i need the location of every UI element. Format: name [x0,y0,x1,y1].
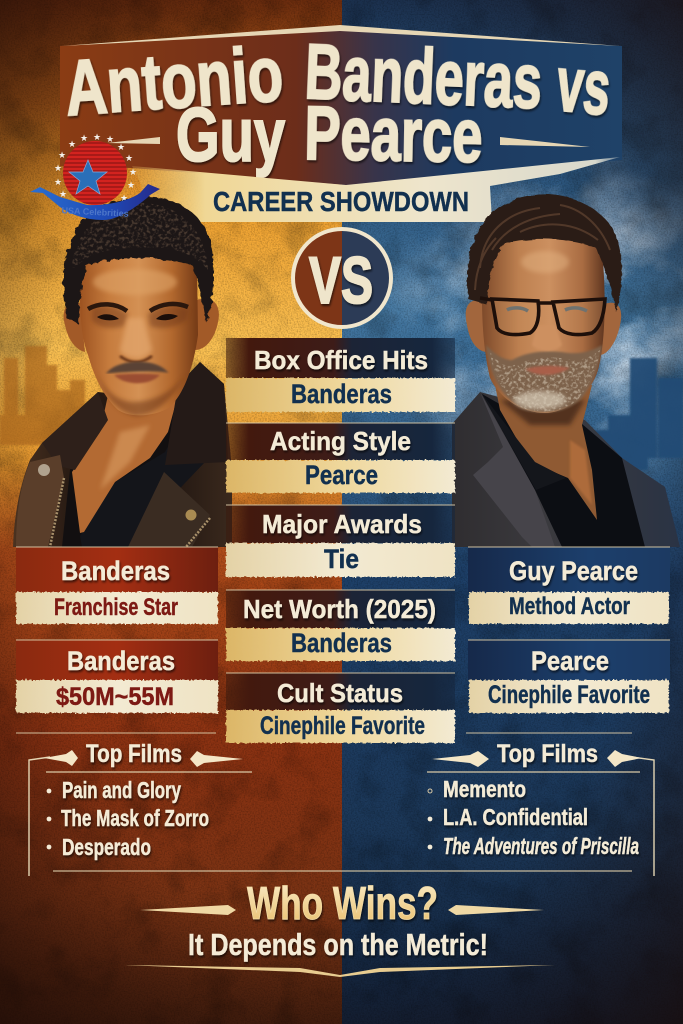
panel: Pearce style: Guy Pearce [509,556,638,586]
star ring: ★ [58,151,66,161]
film list: Memento [443,776,526,802]
shirt [482,394,645,547]
thin dividers [16,423,670,733]
nostril shadow [120,356,152,362]
vs badge [293,229,391,327]
star ring: ★ [59,190,67,200]
neck and chest [72,395,178,533]
ornament: bottom flourish [125,965,555,977]
ornament left [44,750,78,766]
comparison: cult status: Cinephile Favorite [260,712,425,740]
eyes [97,314,178,320]
jacket stud right [186,510,196,520]
subtitle ribbon [132,157,620,222]
panel: Banderas franchise [16,547,218,624]
chin and cheek shadow [95,370,185,416]
hair strands [475,205,610,290]
subtitle text: CAREER SHOWDOWN [213,186,469,217]
hair [467,194,622,312]
beard base [486,345,602,412]
divider above verdict [53,870,632,872]
comparison: box office hits: Box Office Hits [254,345,428,375]
left lapel [473,392,555,547]
comparison: box office hits [226,338,455,412]
comparison: major awards: Tie [324,544,359,574]
hair [63,197,214,324]
star ring: ★ [80,134,88,144]
comparison: net worth: Net Worth (2025) [243,594,436,624]
portrait: Antonio Banderas [13,197,232,547]
bullets [47,789,51,849]
title word: Banderas: Banderas [303,27,544,125]
verdict [188,877,488,962]
nose [120,318,152,358]
frame [632,757,654,876]
star ring: ★ [117,143,125,153]
panel: Banderas net worth: Banderas [67,646,175,676]
title word: Antonio: Antonio [62,29,286,132]
film list: L.A. Confidential [443,804,588,830]
title flourish right [500,137,590,147]
forehead light [93,269,177,295]
banner top rule [62,25,620,46]
comparison: cult status: Cult Status [277,678,403,708]
ears [64,299,219,352]
shirt [62,400,190,547]
bar [226,378,455,412]
bullets [428,789,432,849]
title banner [60,25,622,185]
star ring: ★ [127,181,135,191]
city skyline right [590,358,683,470]
face [482,236,605,413]
hair curls [72,203,208,270]
film list: Pain and Glory [62,777,181,803]
title word: Pearce: Pearce [304,91,483,179]
blue star [69,160,107,194]
comparison: acting style: Pearce [305,460,378,490]
under chin shadow [500,400,585,425]
top films: Pearce [427,740,654,876]
panel: Banderas net worth: $50M~55M [56,683,174,711]
chest highlight [100,425,150,490]
ornament left [432,751,489,767]
star ring: ★ [68,140,76,150]
eye sockets [92,306,188,328]
jacket zip [50,478,210,547]
star ring: ★ [54,164,62,174]
jacket right collar [165,362,228,465]
logo badge [30,133,160,220]
film list: The Mask of Zorro [61,805,209,831]
panel: Pearce style [468,547,670,624]
comparison: cult status [226,673,455,743]
collar left [42,392,108,470]
shirt right [80,405,205,547]
star ring: ★ [120,194,128,204]
title flourish left [107,137,160,144]
star ring: ★ [129,168,137,178]
star ring: ★ [125,154,133,164]
glasses [480,298,605,335]
eyes [507,308,587,311]
ornament right [607,750,642,767]
film list [443,776,639,859]
forehead highlight [521,251,569,273]
comparison: acting style [226,423,455,493]
ribbon label: USA Celebrities [61,205,129,219]
star ring: ★ [54,178,62,188]
film list [61,777,209,860]
comparison: net worth [226,590,455,661]
star ring [54,133,137,204]
lips [525,366,570,375]
subheading: It Depends on the Metric! [188,927,488,962]
top films: Banderas [29,740,252,876]
panel: Pearce cult status [468,640,670,713]
jacket [452,392,680,547]
ornament: who wins flanks [140,905,544,915]
red striped disc [63,141,127,205]
ears [466,300,621,355]
frame [29,757,50,876]
heading: Top Films [497,740,598,768]
panel: Pearce style: Method Actor [509,593,630,620]
jacket stud left [38,464,50,476]
nose [532,325,562,350]
ornament right [190,751,243,767]
panel: Banderas net worth [16,640,218,713]
face [80,254,198,415]
jacket [13,362,232,547]
beard grey grain [490,350,600,411]
city skyline left [0,346,85,445]
lips [114,374,160,383]
who wins heading: Who Wins? [247,877,438,929]
moustache [109,363,165,372]
comparison: box office hits: Banderas [291,379,392,409]
portrait: Guy Pearce [452,194,680,547]
comparison: major awards [226,505,455,577]
star ring: ★ [93,133,101,143]
title word: Guy: Guy [176,93,285,178]
panel: Banderas franchise: Franchise Star [54,594,178,621]
heading: Top Films [86,740,182,768]
jacket lower right [128,472,210,547]
beard white chin [514,391,566,409]
film list: Desperado [62,834,151,860]
vs text: VS [309,243,373,317]
title word: vs: vs [554,39,614,132]
brows [88,304,188,311]
panel: Banderas franchise: Banderas [61,556,170,586]
comparison: acting style: Acting Style [270,426,411,456]
comparison: major awards: Major Awards [262,509,422,539]
panel: Pearce cult status: Pearce [531,646,609,676]
ribbon [30,184,160,220]
neck and chest [495,385,597,520]
chest highlight [570,440,592,505]
comparison: net worth: Banderas [291,628,392,658]
collar left [482,394,566,490]
star ring: ★ [106,135,114,145]
jacket left panel [16,455,64,547]
